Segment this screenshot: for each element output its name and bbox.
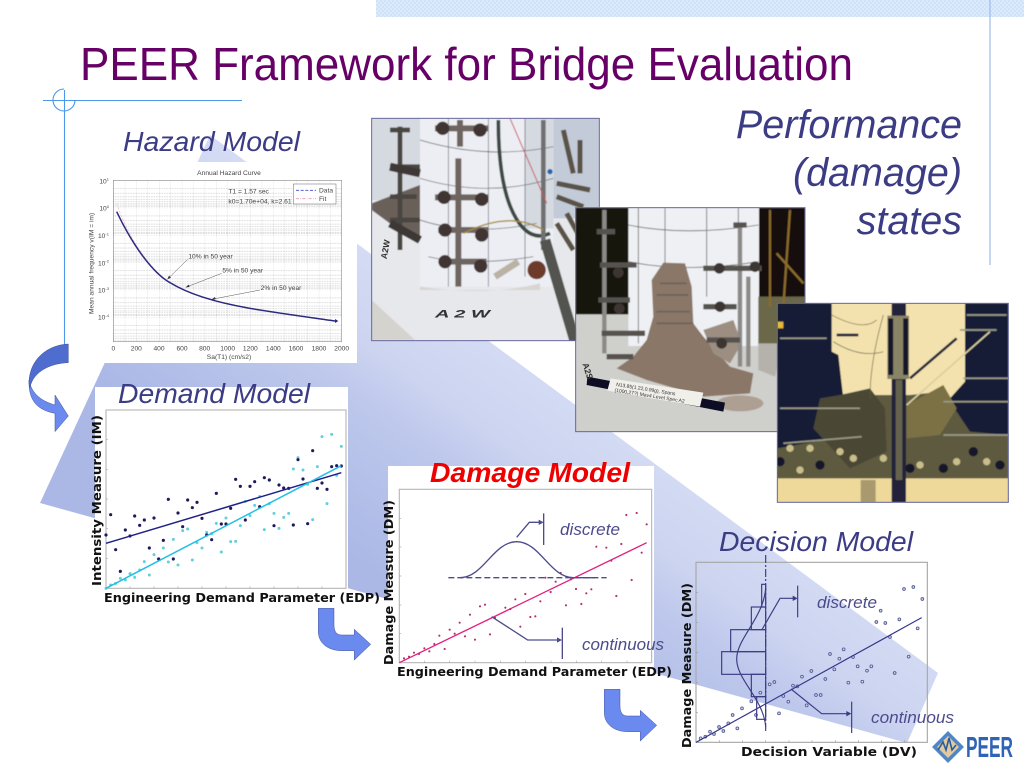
photo: column with spalled concrete bbox=[576, 208, 805, 432]
axis label: intensity measure: Intensity Measure (IM) bbox=[89, 415, 104, 586]
chart: annual hazard curve: 800 bbox=[199, 346, 211, 353]
chart: annual hazard curve: 5% in 50 year bbox=[222, 267, 264, 274]
chart: annual hazard curve: 1800 bbox=[312, 346, 327, 353]
panel: decision model bbox=[679, 526, 954, 759]
axis label: damage measure: Damage Measure (DM) bbox=[381, 500, 396, 665]
heading: performance damage states: (damage) bbox=[793, 151, 962, 195]
scatter: navy points bbox=[106, 451, 341, 571]
panel: damage model bbox=[381, 457, 672, 681]
histogram and distribution bbox=[722, 555, 852, 733]
chart: annual hazard curve: 10 bbox=[99, 206, 107, 213]
axis label: engineering demand parameter: Engineering Demand Parameter (EDP) bbox=[104, 590, 380, 605]
distribution curve bbox=[448, 513, 607, 659]
heading: performance damage states: states bbox=[857, 199, 962, 243]
chart: annual hazard curve: 10 bbox=[98, 288, 105, 295]
background shape: large pale blue triangle bbox=[40, 135, 938, 743]
callout: discrete: discrete bbox=[817, 593, 877, 612]
heading: damage model: Damage Model bbox=[430, 457, 631, 488]
chart: annual hazard curve: 10% in 50 year bbox=[188, 253, 234, 260]
panel: demand model bbox=[89, 378, 380, 609]
heading: performance damage states bbox=[736, 103, 962, 243]
chart: annual hazard curve: -4 bbox=[105, 313, 110, 318]
chart: annual hazard curve: 200 bbox=[131, 346, 142, 353]
photo: column with minor damage: A 2 W bbox=[433, 308, 492, 320]
heading: decision model: Decision Model bbox=[719, 526, 914, 557]
heading: performance damage states: Performance bbox=[736, 103, 962, 147]
chart: annual hazard curve: k0=1.70e+04, k=2.61 bbox=[228, 199, 292, 206]
chart: annual hazard curve: 10 bbox=[98, 233, 105, 240]
chart: annual hazard curve bbox=[88, 170, 349, 361]
chart: annual hazard curve: 1000 bbox=[220, 346, 235, 353]
chart: annual hazard curve: Mean annual frequency v(IM = im) bbox=[88, 213, 95, 314]
chart: annual hazard curve: 10 bbox=[99, 178, 107, 185]
chart: annual hazard curve: 1 bbox=[107, 177, 110, 182]
chart: annual hazard curve: Sa(T1) (cm/s2) bbox=[207, 354, 251, 361]
arrow: hazard to demand bbox=[29, 344, 68, 432]
photo: column with minor damage: A2W bbox=[379, 238, 392, 260]
photo: column with spalled concrete: (1000,27?) Mav4 Level Spec A2 bbox=[614, 388, 685, 405]
heading: demand model: Demand Model bbox=[118, 378, 311, 409]
chart: annual hazard curve: 10 bbox=[98, 315, 105, 322]
chart: annual hazard curve: 600 bbox=[176, 346, 188, 353]
regression line bbox=[696, 618, 922, 742]
axis label: damage measure: Damage Measure (DM) bbox=[679, 583, 694, 748]
photo: column with minor damage bbox=[372, 118, 599, 342]
background band: dotted top strip bbox=[376, 0, 1024, 17]
decorative crosshair rule bbox=[43, 89, 242, 345]
chart: decision scatter plot bbox=[696, 555, 927, 742]
arrow: damage to decision bbox=[604, 689, 657, 741]
regression line: cyan bbox=[106, 466, 341, 588]
chart: annual hazard curve: 1200 bbox=[243, 346, 258, 353]
callout: continuous: continuous bbox=[871, 708, 954, 727]
title: PEER Framework for Bridge Evaluation bbox=[80, 38, 853, 90]
chart: annual hazard curve: 2% in 50 year bbox=[261, 285, 302, 292]
photo: column with spalled concrete: N13.85(1.22,0.99g), Spans bbox=[616, 382, 676, 397]
callout: continuous: continuous bbox=[582, 635, 664, 654]
photo: column with spalled concrete: A2S bbox=[580, 362, 595, 381]
scatter: ring points bbox=[701, 587, 922, 738]
scatter: cyan points bbox=[106, 434, 341, 588]
axis label: engineering demand parameter: Engineering Demand Parameter (EDP) bbox=[397, 664, 672, 679]
logo: PEER bbox=[932, 731, 1013, 764]
callout: discrete: discrete bbox=[560, 520, 620, 539]
panel: hazard model bbox=[88, 126, 357, 363]
chart: demand scatter plot bbox=[106, 410, 346, 588]
regression line: magenta bbox=[399, 543, 647, 663]
arrow: demand to damage bbox=[318, 608, 371, 660]
chart: annual hazard curve: -1 bbox=[105, 231, 110, 236]
axis label: decision variable: Decision Variable (DV) bbox=[741, 744, 917, 759]
chart: annual hazard curve: 0 bbox=[107, 204, 110, 209]
chart: annual hazard curve: 2000 bbox=[334, 346, 349, 353]
heading: hazard model: Hazard Model bbox=[123, 126, 301, 157]
chart: annual hazard curve: 1400 bbox=[266, 346, 281, 353]
chart: annual hazard curve: -3 bbox=[105, 286, 110, 291]
chart: annual hazard curve: 0 bbox=[111, 346, 115, 353]
chart: annual hazard curve: 400 bbox=[153, 346, 165, 353]
chart: annual hazard curve: 1600 bbox=[289, 346, 304, 353]
chart: annual hazard curve: Annual Hazard Curve bbox=[197, 170, 261, 177]
scatter: pink points bbox=[404, 513, 647, 658]
chart: annual hazard curve: Fit bbox=[319, 196, 327, 203]
photo: close-up of failed column, sepia bbox=[777, 303, 1008, 502]
chart: annual hazard curve: T1 = 1.57 sec bbox=[228, 189, 270, 196]
chart: annual hazard curve: -2 bbox=[105, 259, 110, 264]
regression line: navy bbox=[106, 473, 341, 543]
chart: damage scatter plot bbox=[399, 489, 652, 663]
chart: annual hazard curve: Data bbox=[319, 188, 333, 195]
chart: annual hazard curve: 10 bbox=[98, 260, 105, 267]
